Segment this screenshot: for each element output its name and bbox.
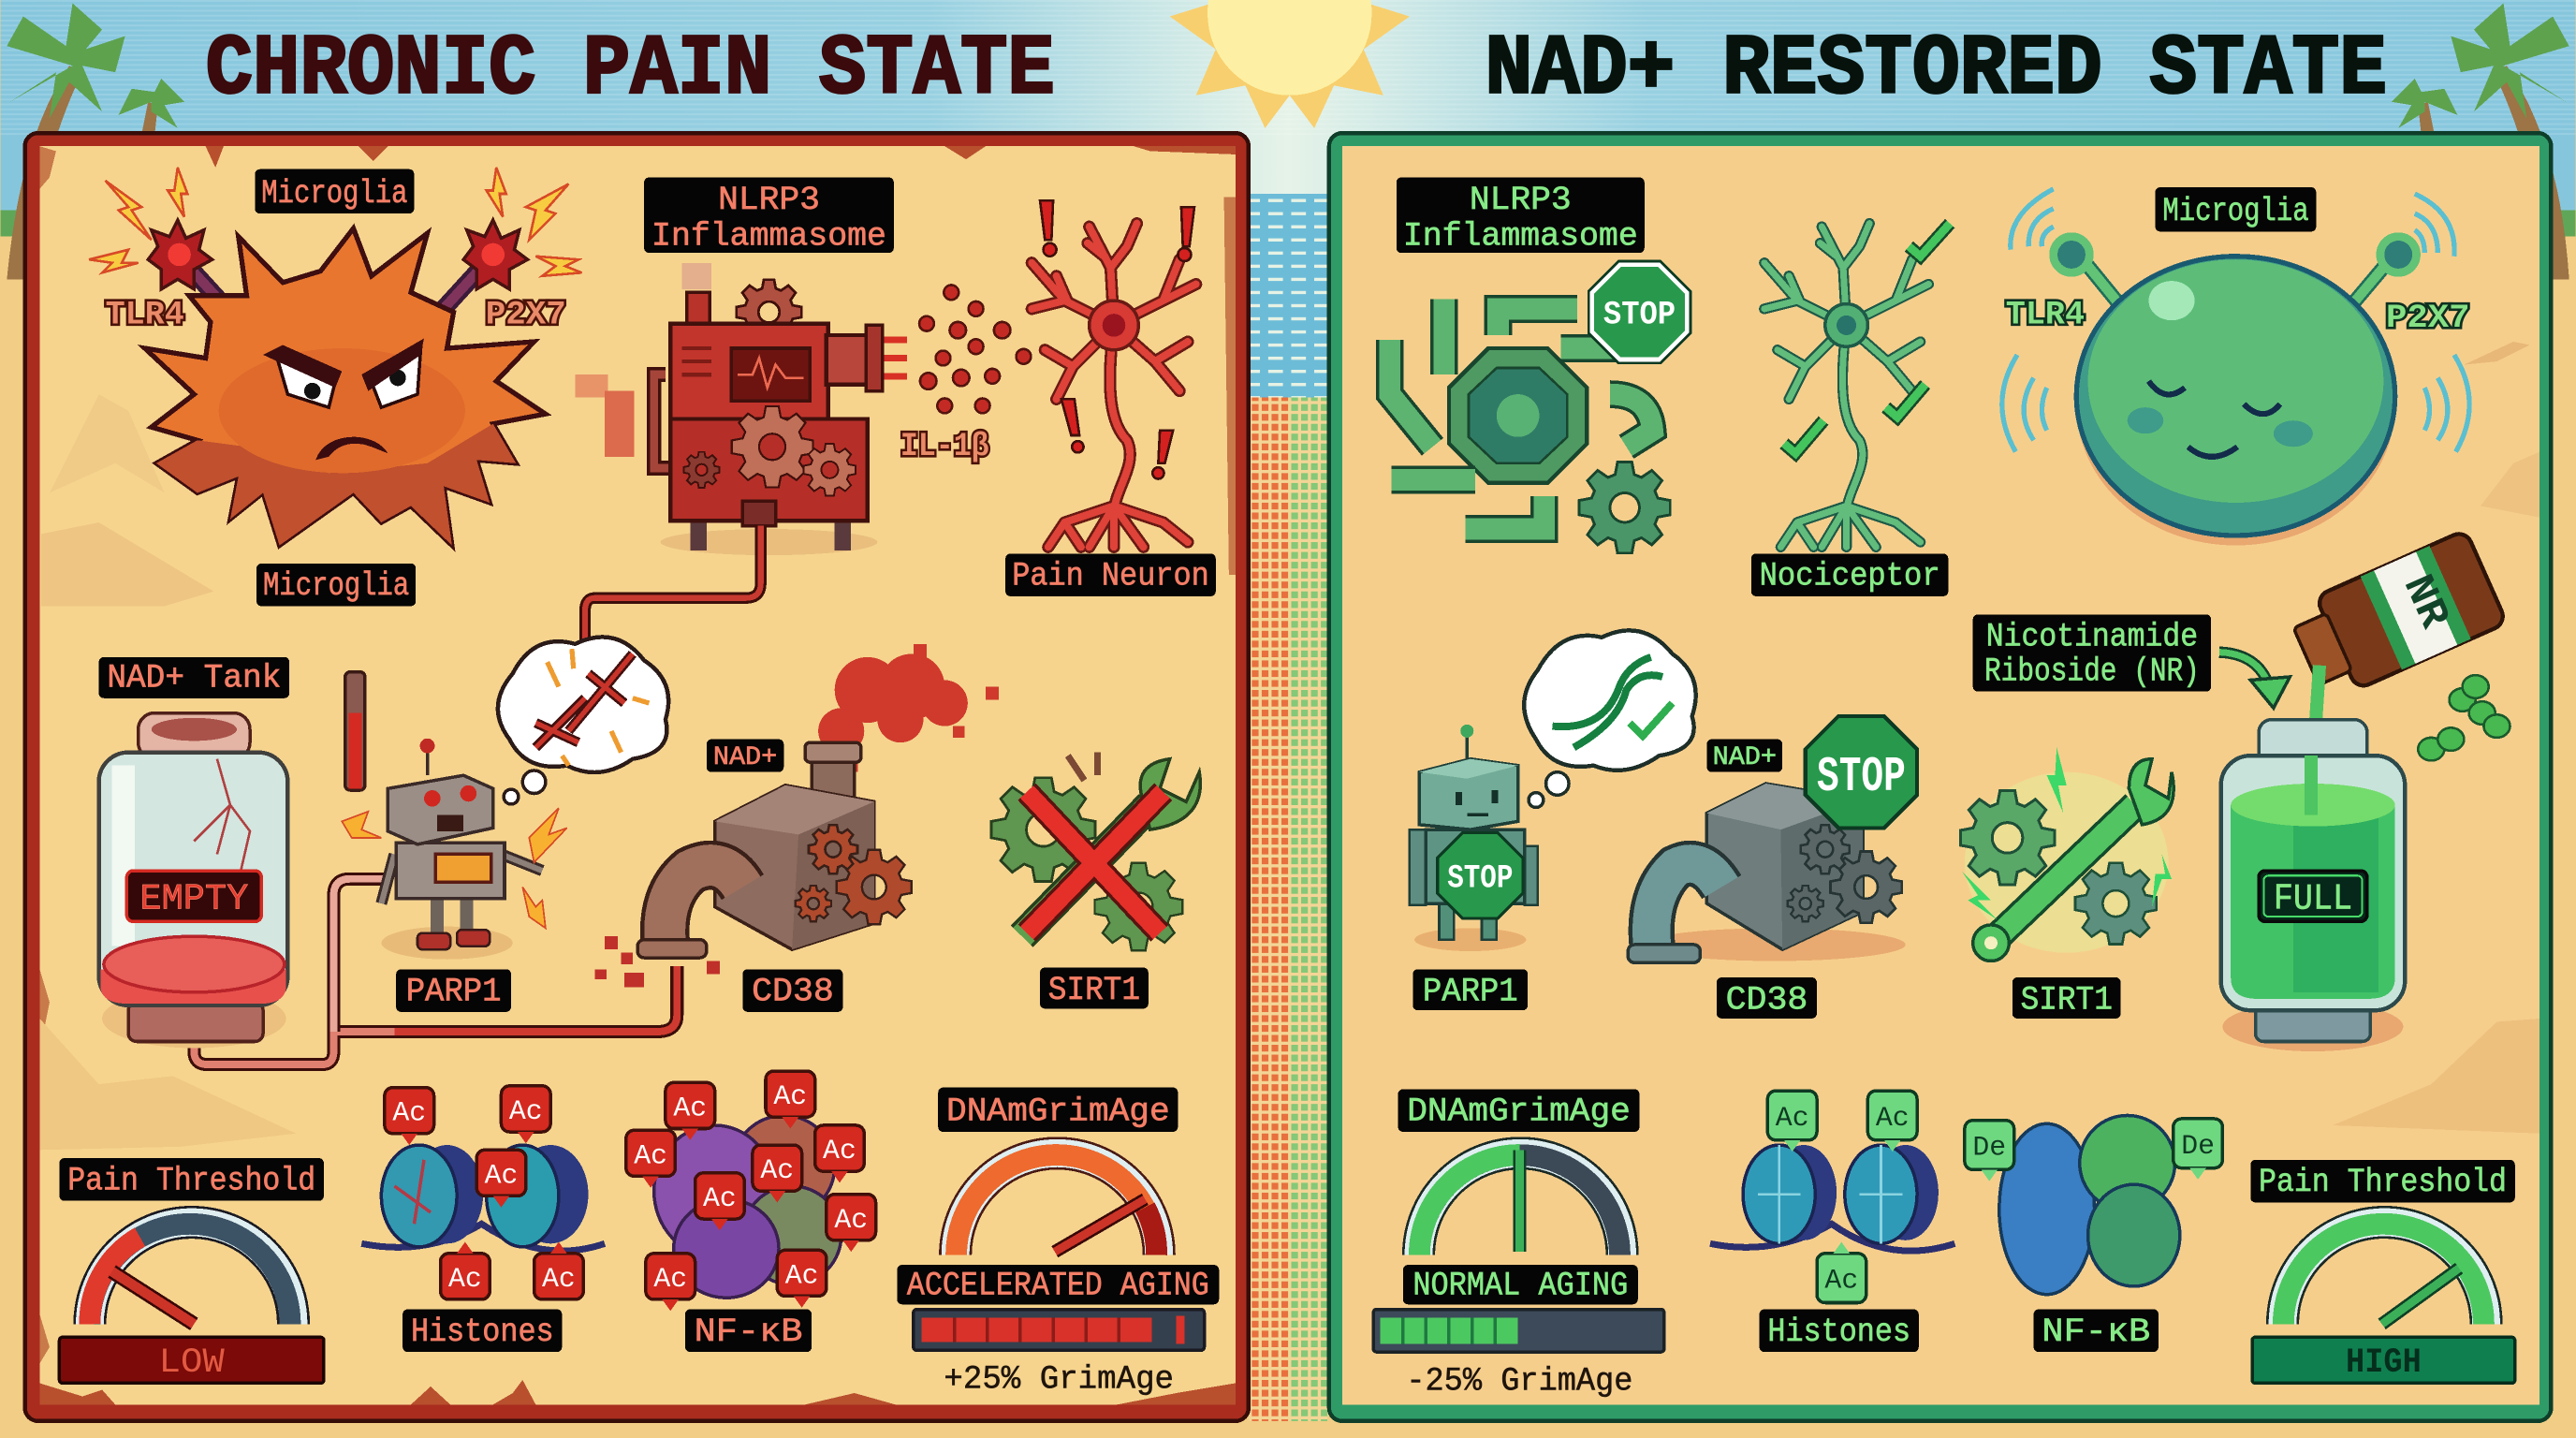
label: SIRT1: SIRT1	[1048, 972, 1140, 1009]
calming waves	[2002, 189, 2469, 452]
arrow: NR into tank	[2219, 653, 2290, 708]
check marks	[1784, 224, 1950, 453]
connector pipes	[194, 526, 761, 1064]
label: NAD+ small: NAD+	[713, 743, 777, 772]
stop sign: NLRP3	[1588, 261, 1690, 363]
gauge: accelerated grim age	[956, 1153, 1159, 1255]
label: P2X7: P2X7	[2386, 300, 2470, 337]
tag group: acetyl on NF-κB: Ac	[673, 1092, 707, 1123]
label: TLR4: TLR4	[106, 297, 184, 334]
label: histones: Histones	[411, 1313, 554, 1351]
NF-κB complex	[654, 1115, 842, 1298]
label: CD38: CD38	[1726, 981, 1808, 1019]
stop sign: CD38	[1806, 716, 1917, 828]
value: +25% grim age: +25% GrimAge	[944, 1361, 1174, 1399]
sleepy face	[2148, 381, 2280, 457]
blob body	[2076, 266, 2395, 546]
tag group: acetyl on histones: Ac	[1876, 1102, 1910, 1134]
panel frame right	[1329, 133, 2551, 1421]
thought bubble: broken DNA	[498, 637, 668, 804]
icon: sun	[1170, 0, 1410, 128]
label: NF-κB	[685, 1310, 812, 1352]
label: empty	[126, 871, 261, 921]
tag group: acetyl on NF-κB: Ac	[653, 1263, 687, 1295]
label: microglia: Microglia	[2162, 193, 2309, 230]
label: NF-κB: NF-κB	[695, 1313, 802, 1351]
SIRT1 wrench active	[1960, 747, 2174, 961]
label: normal aging: NORMAL AGING	[1412, 1268, 1628, 1305]
label: PARP1: PARP1	[406, 974, 501, 1011]
label: NF-κB	[2034, 1310, 2159, 1352]
receptors TLR4 and P2X7	[148, 220, 528, 312]
label: DNAmGrimAge: DNAmGrimAge	[946, 1093, 1170, 1131]
tag group: acetyl on NF-κB: Ac	[823, 1135, 856, 1167]
label: NLRP3 inflammasome: NLRP3	[718, 182, 820, 219]
label: NLRP3 inflammasome	[1397, 178, 1645, 255]
label: nociceptor: Nociceptor	[1760, 558, 1940, 595]
label: NAD+ tank: NAD+ Tank	[107, 659, 281, 697]
label: pain neuron: Pain Neuron	[1012, 558, 1209, 595]
NLRP3 inflammasome machine	[575, 263, 907, 555]
angry face	[263, 338, 424, 460]
label on bottle: NR	[2393, 567, 2458, 637]
tag group: acetyl on NF-κB: Ac	[834, 1204, 868, 1236]
label: TLR4: TLR4	[2006, 297, 2085, 334]
label: microglia bottom: Microglia	[263, 567, 409, 605]
microglia angry cell	[89, 168, 581, 546]
CD38 pump with smoke	[595, 644, 999, 988]
tag group: acetyl on NF-κB: Ac	[634, 1139, 667, 1171]
label: pain threshold: Pain Threshold	[2259, 1164, 2507, 1201]
label: nicotinamide riboside: Nicotinamide	[1986, 619, 2198, 656]
NR bottle pouring	[2286, 530, 2507, 814]
full NAD+ tank	[2221, 720, 2405, 1051]
NAD+ level tube	[345, 672, 365, 790]
tag group: acetyl on histones	[385, 1086, 583, 1299]
tag group: acetyl on histones: Ac	[392, 1097, 426, 1129]
label: accelerated aging: ACCELERATED AGING	[907, 1268, 1209, 1305]
tag group: deacetyl on NF-κB: De	[1972, 1132, 2006, 1164]
tag group: acetyl on NF-κB	[626, 1071, 876, 1311]
PARP1 robot healthy	[1410, 725, 1538, 951]
PARP1 robot damaged	[342, 739, 567, 960]
thought bubble: healthy DNA	[1524, 630, 1696, 807]
pain neuron	[1032, 224, 1196, 547]
exclamation marks	[1040, 200, 1194, 479]
gauge: normal grim age	[1419, 1150, 1622, 1255]
stop sign: NLRP3: STOP	[1603, 297, 1676, 334]
gauge: high pain threshold	[2282, 1223, 2486, 1324]
label: empty: EMPTY	[139, 878, 248, 919]
label: histones: Histones	[1767, 1313, 1910, 1351]
IL-1β cytokine dots	[919, 285, 1031, 413]
panel: chronic pain state	[25, 133, 1249, 1421]
label: nicotinamide riboside: Riboside (NR)	[1984, 653, 2200, 690]
label: microglia top: Microglia	[261, 175, 407, 213]
SIRT1 wrench crossed out	[991, 753, 1200, 950]
NLRP3 inflammasome disassembled	[1390, 299, 1670, 553]
stop sign on robot	[1438, 833, 1523, 918]
status: high	[2252, 1337, 2515, 1383]
label: full: FULL	[2274, 878, 2352, 919]
label: DNAmGrimAge: DNAmGrimAge	[1407, 1093, 1631, 1131]
label: NF-κB: NF-κB	[2042, 1313, 2150, 1351]
CD38 pump inactive	[1628, 784, 1906, 962]
bar: -25% grim age	[1373, 1310, 1664, 1352]
tag group: acetyl on NF-κB: Ac	[785, 1259, 819, 1291]
calm microglia	[2002, 189, 2469, 546]
label: PARP1: PARP1	[1423, 974, 1518, 1011]
label: NLRP3 inflammasome	[644, 178, 894, 255]
status: low	[59, 1337, 324, 1383]
gauge: low pain threshold	[90, 1223, 294, 1324]
icon: palm trees left	[7, 4, 184, 279]
label: CD38	[742, 969, 842, 1012]
label: NAD+ small: NAD+	[1713, 743, 1777, 772]
tag group: deacetyl on NF-κB: De	[2181, 1130, 2215, 1162]
label: P2X7: P2X7	[486, 297, 566, 334]
tag group: acetyl on histones: Ac	[485, 1159, 518, 1191]
tag group: acetyl on histones: Ac	[448, 1263, 482, 1295]
empty NAD+ tank	[99, 713, 287, 1049]
histones healthy	[1710, 1145, 1954, 1251]
NF-κB healthy	[1999, 1115, 2180, 1295]
status: low: LOW	[159, 1343, 226, 1383]
status: high: HIGH	[2346, 1343, 2422, 1383]
label: SIRT1: SIRT1	[2021, 981, 2113, 1019]
label: NLRP3 inflammasome: Inflammasome	[651, 217, 886, 255]
spiky body	[145, 228, 546, 546]
tag group: deacetyl on NF-κB	[1965, 1119, 2222, 1181]
label: NLRP3 inflammasome: NLRP3	[1470, 182, 1572, 219]
histones with acetyl tags	[361, 1145, 605, 1251]
lightning bolts	[89, 168, 581, 276]
label: full	[2259, 871, 2367, 921]
panel frame left	[25, 133, 1249, 1421]
stop sign on robot: STOP	[1447, 860, 1513, 898]
icon: palm trees right	[2392, 4, 2569, 279]
label: NLRP3 inflammasome: Inflammasome	[1403, 217, 1638, 255]
bar: +25% grim age	[914, 1310, 1205, 1350]
nociceptor neuron healthy	[1764, 224, 1928, 547]
stop sign: CD38: STOP	[1817, 749, 1906, 805]
tag group: acetyl on histones: Ac	[542, 1263, 576, 1295]
tag group: acetyl on NF-κB: Ac	[760, 1154, 794, 1186]
value: -25% grim age: -25% GrimAge	[1406, 1362, 1632, 1400]
pills	[2418, 675, 2510, 760]
tag group: acetyl on histones: Ac	[509, 1095, 543, 1127]
title: NAD+ restored state: NAD+ RESTORED STATE	[1486, 22, 2387, 118]
label: IL-1β: IL-1β	[900, 428, 989, 465]
tag group: acetyl on histones	[1767, 1091, 1917, 1302]
panel: NAD+ restored state	[1329, 133, 2551, 1421]
tag group: acetyl on histones: Ac	[1776, 1102, 1809, 1134]
label: pain threshold: Pain Threshold	[67, 1162, 315, 1199]
tag group: acetyl on histones: Ac	[1824, 1265, 1858, 1297]
tag group: acetyl on NF-κB: Ac	[703, 1182, 737, 1214]
title: chronic pain state: CHRONIC PAIN STATE	[206, 22, 1055, 118]
label: CD38: CD38	[752, 974, 834, 1011]
tag group: acetyl on NF-κB: Ac	[773, 1080, 807, 1112]
label: nicotinamide riboside	[1973, 614, 2211, 692]
antennae	[2054, 237, 2416, 312]
